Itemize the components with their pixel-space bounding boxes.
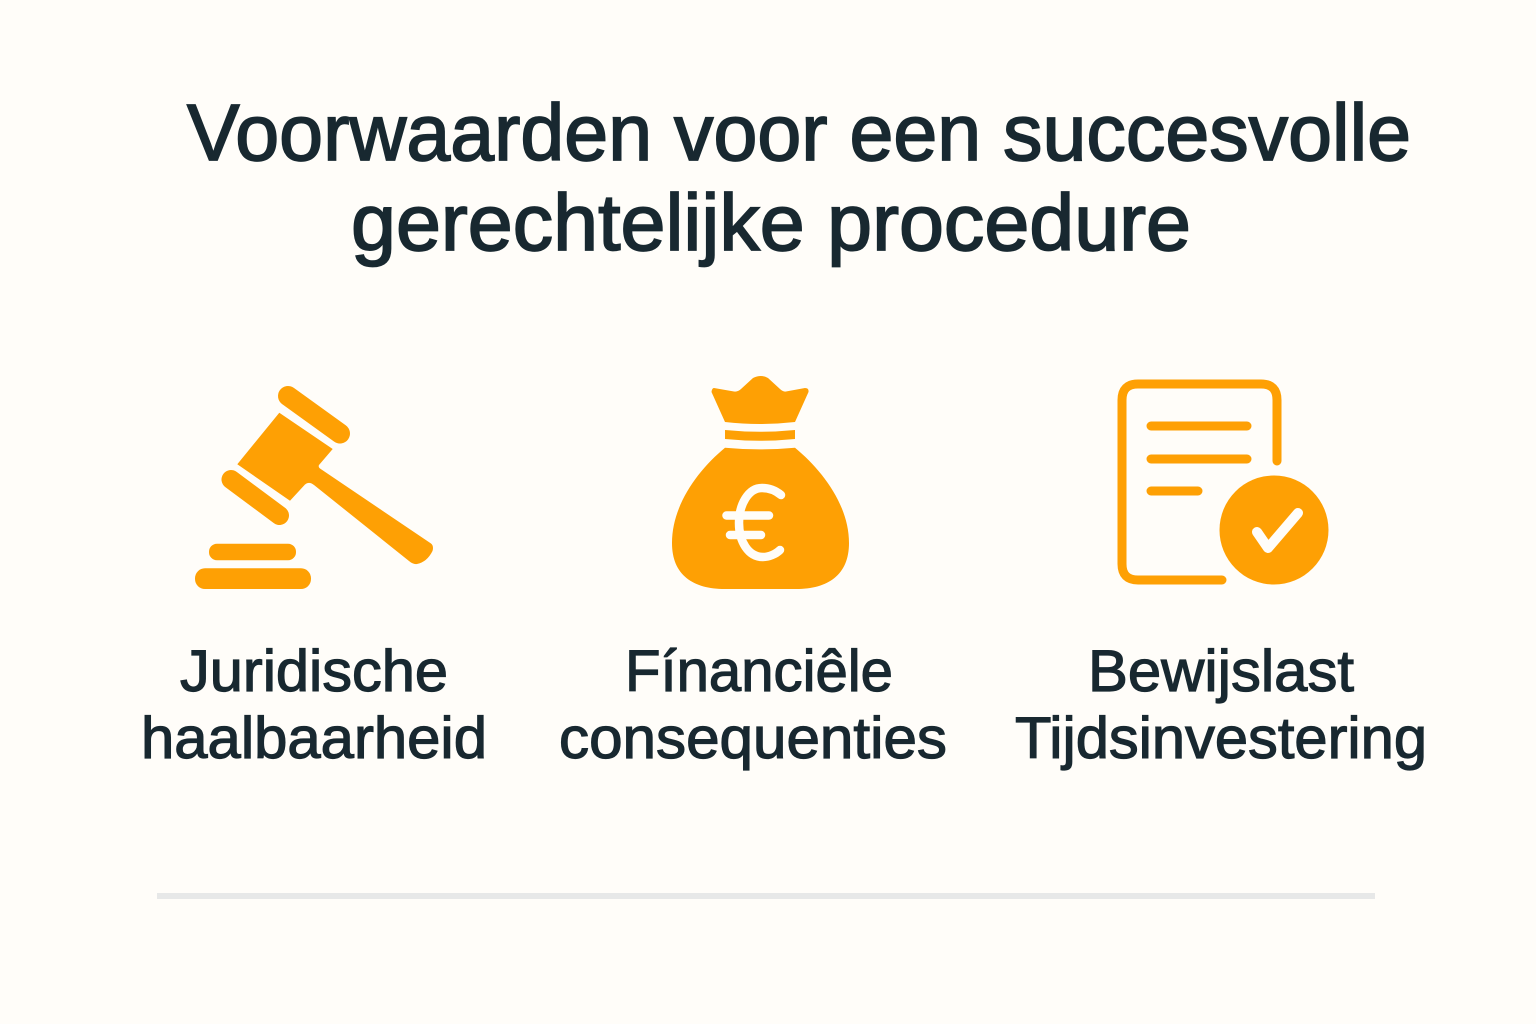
icon: gavel xyxy=(195,396,433,589)
label: bewijslast tijdsinvestering xyxy=(1015,639,1427,771)
title: gerechtelijke procedure xyxy=(351,178,1191,267)
label: juridische haalbaarheid xyxy=(141,639,487,771)
icon: money bag with euro xyxy=(672,376,849,589)
icon: document with check xyxy=(1122,384,1328,584)
label: juridische haalbaarheid: haalbaarheid xyxy=(141,706,487,771)
label: bewijslast tijdsinvestering: Tijdsinvestering xyxy=(1015,706,1427,771)
title: Voorwaarden voor een succesvolle xyxy=(187,88,1411,177)
label: bewijslast tijdsinvestering: Bewijslast xyxy=(1088,639,1354,704)
label: juridische haalbaarheid: Juridische xyxy=(180,639,448,704)
label: financiele consequenties xyxy=(559,639,947,771)
label: financiele consequenties: Fínanciêle xyxy=(625,639,893,704)
title xyxy=(187,88,1411,267)
label: financiele consequenties: consequenties xyxy=(559,706,947,771)
